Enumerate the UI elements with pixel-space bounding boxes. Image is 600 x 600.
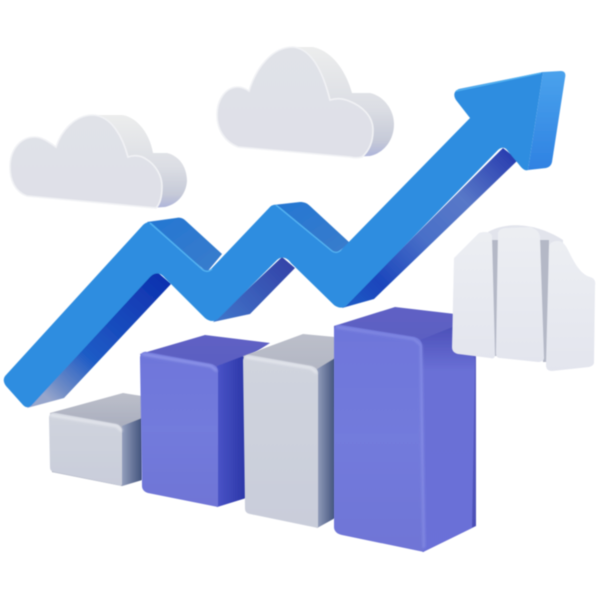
bar: tall purple xyxy=(140,335,270,507)
cloud: right xyxy=(217,47,394,158)
bar highlight xyxy=(336,327,424,548)
bar highlight xyxy=(142,354,217,371)
arrow: edge highlights xyxy=(150,73,541,271)
panel: gaps xyxy=(491,240,549,362)
bar: short grey xyxy=(49,393,142,486)
panel: left leaf xyxy=(452,232,495,358)
bar highlight xyxy=(50,415,122,431)
panel: center leaf xyxy=(496,227,544,362)
bar: tall grey xyxy=(243,334,335,528)
bar highlight xyxy=(245,357,317,373)
cloud: left xyxy=(10,115,187,208)
bar: tallest purple xyxy=(334,307,476,552)
arrow: growth trend line xyxy=(4,71,565,408)
arrow: top bevels xyxy=(147,202,350,272)
arrow: head side xyxy=(528,71,565,170)
panel: white folded panels xyxy=(452,225,595,371)
panel: right leaf xyxy=(546,241,595,371)
arrow: front face xyxy=(4,72,543,407)
arrow: underside shading xyxy=(27,148,518,408)
